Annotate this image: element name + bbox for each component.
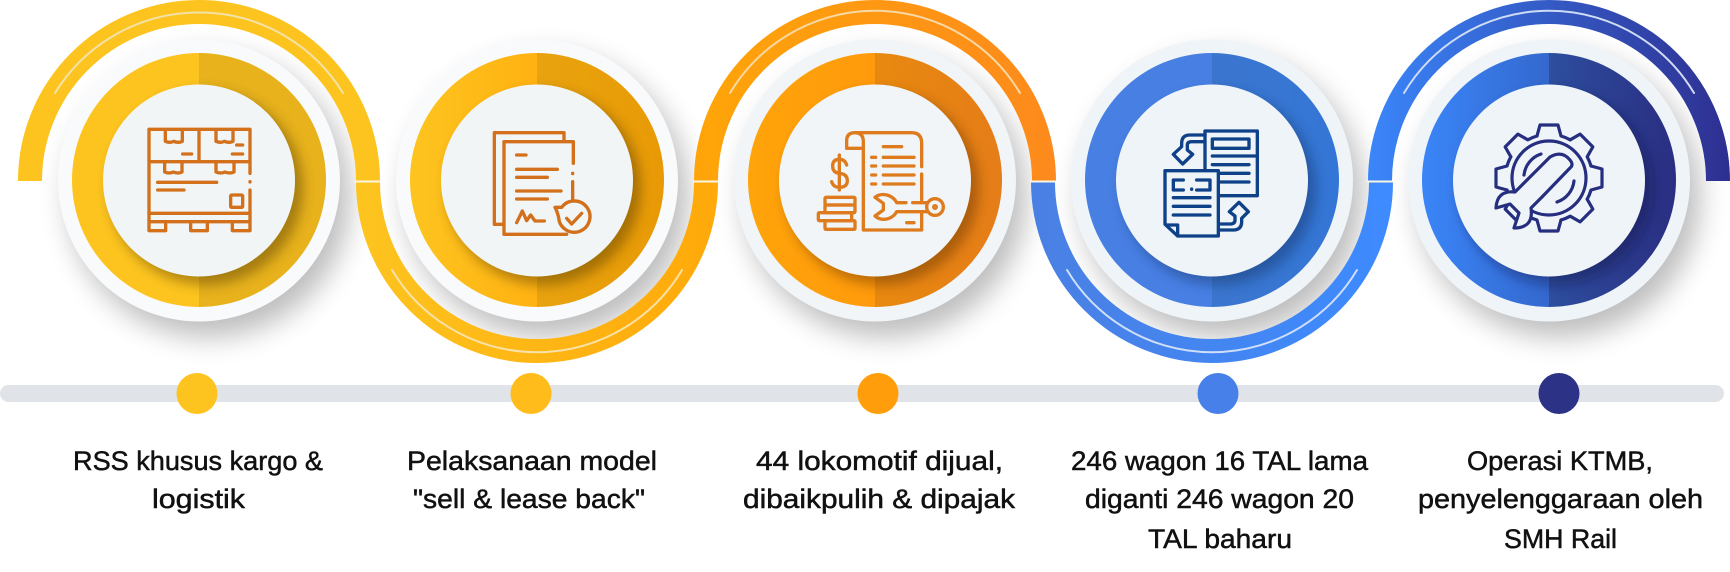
text: step 2: Pelaksanaan model bbox=[407, 446, 657, 476]
text: step 1: logistik bbox=[152, 484, 246, 514]
arc 1 bbox=[30, 12, 368, 181]
icon: documents swap bbox=[1165, 131, 1257, 236]
ribbon seams bbox=[355, 180, 1393, 182]
serpentine ribbon bbox=[30, 12, 1718, 351]
panel: circle 2 contract bbox=[396, 40, 678, 322]
text: step 1: RSS khusus kargo & bbox=[73, 446, 323, 476]
text: step 5: Operasi KTMB, bbox=[1467, 446, 1653, 476]
text: step 1 bbox=[73, 446, 323, 514]
text: step 3: dibaikpulih & dipajak bbox=[743, 484, 1016, 514]
thin highlight lines on ribbon bbox=[55, 11, 1694, 352]
arc 3 bbox=[706, 12, 1044, 181]
text: step 4 bbox=[1071, 446, 1369, 554]
arc 2 bbox=[368, 182, 706, 351]
panel: circle 3 locomotive sale bbox=[734, 40, 1016, 322]
arc 4 bbox=[1043, 182, 1381, 351]
text: step 4: TAL baharu bbox=[1148, 524, 1292, 554]
timeline dots bbox=[176, 373, 1580, 414]
text: step 4: 246 wagon 16 TAL lama bbox=[1071, 446, 1369, 476]
panel: circle 1 cargo bbox=[58, 40, 340, 322]
icon: pallet of boxes bbox=[149, 129, 250, 231]
text: step 3: 44 lokomotif dijual, bbox=[756, 446, 1003, 476]
panel: circle 4 wagon replacement bbox=[1071, 40, 1353, 322]
text: step 2: "sell & lease back" bbox=[413, 484, 645, 514]
text: step 5: SMH Rail bbox=[1504, 524, 1617, 554]
disc drop shadows bbox=[68, 55, 1700, 337]
text: step 2 bbox=[407, 446, 657, 514]
text: step 4: diganti 246 wagon 20 bbox=[1085, 484, 1354, 514]
arc 5 bbox=[1380, 12, 1718, 181]
text: step 3 bbox=[743, 446, 1016, 514]
text: step 5 bbox=[1418, 446, 1703, 554]
timeline bar bbox=[0, 385, 1724, 402]
icon: invoice, dollar and wrench bbox=[818, 133, 943, 230]
text: step 5: penyelenggaraan oleh bbox=[1418, 484, 1703, 514]
icon: gear with wrench bbox=[1496, 125, 1602, 231]
icon: contract with check badge bbox=[494, 133, 590, 234]
panel: circle 5 operations bbox=[1408, 40, 1690, 322]
